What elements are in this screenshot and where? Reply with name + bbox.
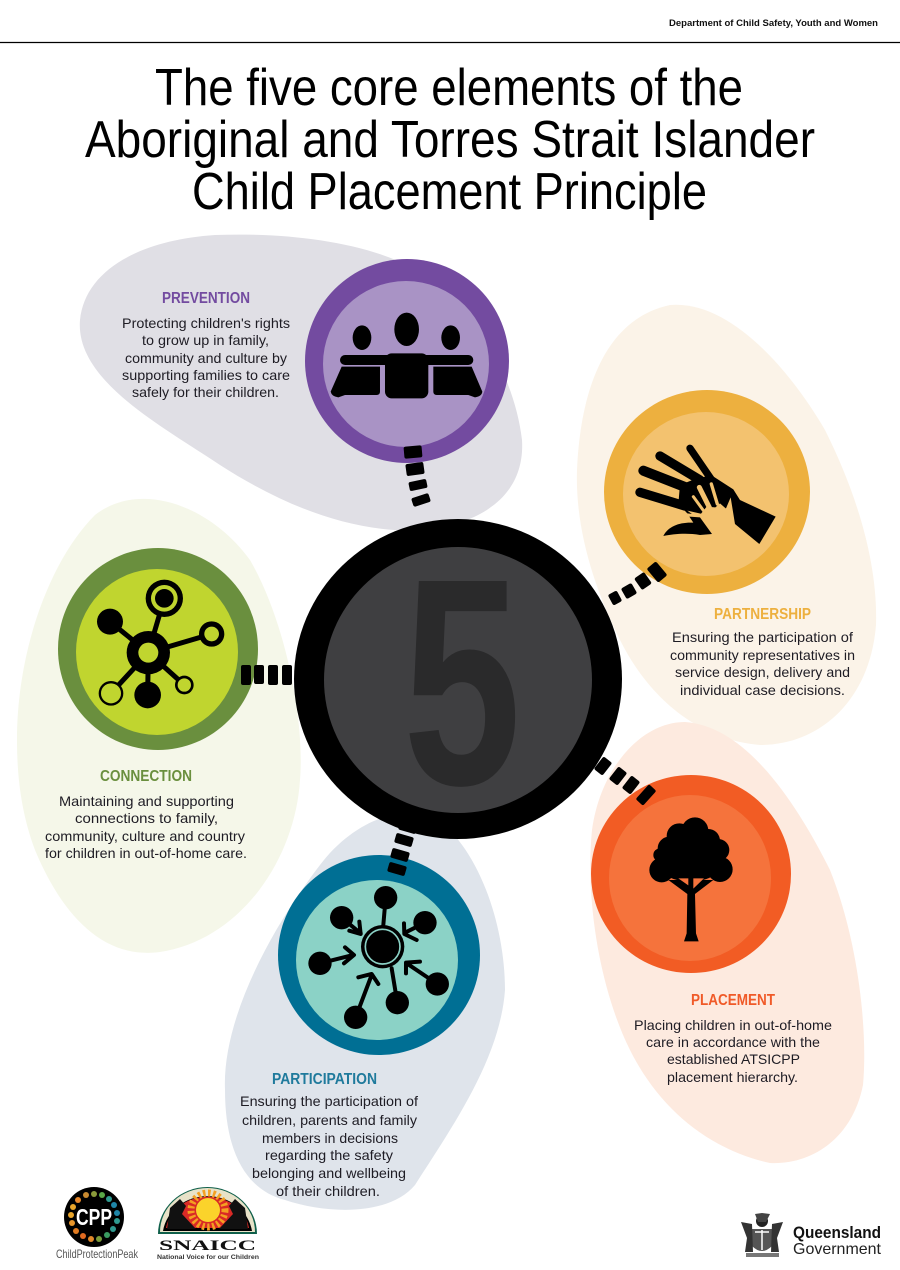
connection text: for children in out-of-home care. xyxy=(45,845,247,861)
panel: participation xyxy=(225,812,505,1210)
title: The five core elements of the xyxy=(155,59,743,117)
placement text: care in accordance with the xyxy=(646,1034,820,1050)
prevention text: community and culture by xyxy=(125,350,287,366)
logo: Queensland Government: Government xyxy=(793,1241,882,1258)
placement text: Placing children in out-of-home xyxy=(634,1017,832,1033)
connection text: Maintaining and supporting xyxy=(59,793,234,809)
icon: coat of arms xyxy=(741,1213,783,1257)
partnership text: individual case decisions. xyxy=(680,682,845,698)
placement text: placement hierarchy. xyxy=(667,1069,798,1085)
participation text: Ensuring the participation of xyxy=(240,1093,418,1109)
participation text: of their children. xyxy=(276,1183,380,1199)
header: department name: Department of Child Safety, Youth and Women xyxy=(669,18,878,29)
prevention text xyxy=(122,315,290,400)
title: Child Placement Principle xyxy=(192,163,707,221)
logo: Queensland Government xyxy=(741,1213,882,1258)
partnership text: service design, delivery and xyxy=(675,664,850,680)
participation heading: PARTICIPATION xyxy=(272,1071,377,1088)
arrow: dashes to participation xyxy=(387,820,418,876)
arrow: dashes to placement xyxy=(594,756,656,806)
logo: Child Protection Peak: ChildProtectionPeak xyxy=(56,1247,139,1261)
partnership text: Ensuring the participation of xyxy=(672,629,853,645)
placement text xyxy=(634,1017,832,1085)
connection heading: CONNECTION xyxy=(100,768,192,785)
prevention heading: PREVENTION xyxy=(162,290,250,307)
partnership text xyxy=(670,629,855,698)
connection text: connections to family, xyxy=(75,810,218,826)
placement text: established ATSICPP xyxy=(667,1051,800,1067)
participation text: regarding the safety xyxy=(265,1147,393,1163)
icon: participation arrows to centre xyxy=(278,855,480,1055)
central circle with number 5 xyxy=(294,517,622,847)
prevention text: Protecting children's rights xyxy=(122,315,290,331)
title xyxy=(85,59,815,221)
icon: connection network xyxy=(58,548,258,750)
icon: placement tree xyxy=(591,775,791,973)
prevention text: supporting families to care xyxy=(122,367,290,383)
partnership heading: PARTNERSHIP xyxy=(714,606,811,623)
logo: Child Protection Peak: CPP xyxy=(76,1204,112,1230)
panel: prevention xyxy=(80,235,522,531)
panel: connection xyxy=(17,499,301,953)
icon: partnership hands xyxy=(604,390,810,594)
participation text: children, parents and family xyxy=(242,1112,417,1128)
arrow: dashes to prevention xyxy=(404,445,431,507)
icon: prevention people xyxy=(305,259,509,463)
partnership text: community representatives in xyxy=(670,647,855,663)
panel: placement xyxy=(590,722,864,1163)
panel: partnership xyxy=(577,305,876,745)
prevention text: safely for their children. xyxy=(132,384,279,400)
connection text: community, culture and country xyxy=(45,828,245,844)
logo: Queensland Government: Queensland xyxy=(793,1223,881,1242)
title: Aboriginal and Torres Strait Islander xyxy=(85,111,815,169)
participation text: belonging and wellbeing xyxy=(252,1165,406,1181)
arrow: dashes to connection xyxy=(241,665,292,685)
participation text xyxy=(240,1093,418,1199)
placement heading: PLACEMENT xyxy=(691,992,775,1009)
central circle with number 5: 5 xyxy=(403,517,521,847)
connection text xyxy=(45,793,247,861)
logo: SNAICC: SNAICC xyxy=(159,1238,256,1254)
logo: SNAICC xyxy=(157,1187,259,1261)
logo: SNAICC: National Voice for our Children xyxy=(157,1255,259,1261)
logo: Child Protection Peak xyxy=(56,1187,139,1261)
arrow: dashes to partnership xyxy=(608,561,667,606)
participation text: members in decisions xyxy=(262,1130,398,1146)
prevention text: to grow up in family, xyxy=(142,332,269,348)
